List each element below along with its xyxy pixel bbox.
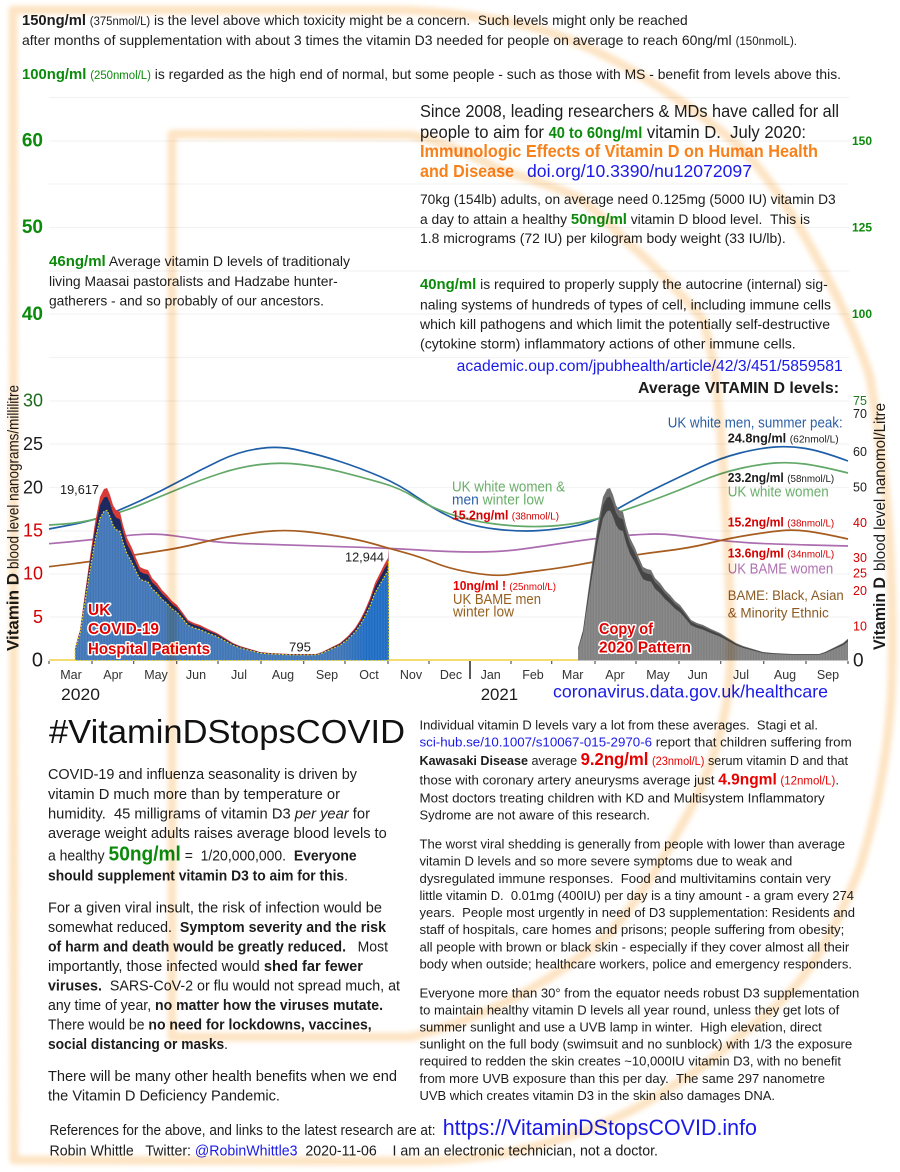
- label: BAME definition: & Minority Ethnic: [728, 605, 829, 621]
- x axis month labels: Feb: [522, 668, 544, 682]
- right column: viral shedding paragraph: body when outside; healthcare workers, police and emergency responders.: [420, 956, 852, 971]
- label: white men summer peak: [668, 416, 843, 446]
- right axis: nmol/L scale: 100: [852, 307, 872, 321]
- top text: toxicity and high-normal levels: 150ng/ml (375nmol/L) is the level above which toxicity might be a concern. Such levels might only be reached: [22, 12, 688, 29]
- x axis month labels: Mar: [60, 668, 82, 682]
- left axis title: [4, 385, 22, 651]
- right axis: nmol/L scale: 20: [853, 584, 867, 598]
- year labels: 2020: [61, 685, 100, 704]
- x axis month labels: Jun: [688, 668, 708, 682]
- right column: viral shedding paragraph: dysregulated immune responses. Food and multivitamins contain very: [420, 871, 831, 886]
- label: UK COVID-19 hospital patients: [88, 602, 210, 658]
- left column: seasonality paragraph: humidity. 45 milligrams of vitamin D3 per year for: [48, 807, 370, 823]
- callout: recommended 40 to 60 ng/ml: Since 2008, leading researchers & MDs have called for all: [420, 101, 839, 121]
- text block: 40 ng/ml immune system: 40ng/ml is required to properly supply the autocrine (internal) sig-: [420, 276, 828, 293]
- left column: health benefits paragraph: [48, 1069, 397, 1105]
- left column: seasonality paragraph: [48, 767, 387, 885]
- left axis: ng/ml scale: 40: [22, 304, 43, 325]
- left column: viral insult paragraph: of harm and death would be greatly reduced. Most: [48, 940, 388, 956]
- label: white women: 23.2ng/ml (58nmol/L): [728, 470, 834, 485]
- label: BAME women: 13.6ng/ml (34nmol/L): [728, 546, 834, 561]
- left axis: ng/ml scale: 10: [23, 564, 43, 584]
- text block: daily dose for 50 ng/ml: 1.8 micrograms (72 IU) per kilogram body weight (33 IU/lb).: [420, 230, 786, 246]
- right axis: nmol/L scale: 10: [853, 620, 867, 634]
- top text: toxicity and high-normal levels: [22, 12, 841, 83]
- left column: seasonality paragraph: average weight adults raises average blood levels to: [48, 826, 387, 842]
- year labels: 2021: [481, 685, 518, 704]
- callout: recommended 40 to 60 ng/ml: [420, 101, 839, 181]
- right column: sunlight paragraph: Everyone more than 30° from the equator needs robust D3 supplementation: [420, 986, 859, 1001]
- left column: seasonality paragraph: should supplement vitamin D3 to aim for this.: [48, 869, 348, 885]
- x axis month labels: Oct: [359, 668, 379, 682]
- footer: references and credits: Robin Whittle Twitter: @RobinWhittle3 2020-11-06 I am an electronic technician, not a doctor.: [50, 1144, 658, 1160]
- callout: recommended 40 to 60 ng/ml: Immunologic Effects of Vitamin D on Human Health: [420, 141, 818, 161]
- heading: average vitamin D levels: Average VITAMIN D levels:: [638, 380, 839, 397]
- footer: references and credits: References for the above, and links to the latest research are at:: [50, 1123, 436, 1139]
- right column: sunlight paragraph: from more UVB exposure than this per day. The same 297 nanometre: [420, 1071, 825, 1086]
- left axis title: blood level nanograms/millilitre: [6, 385, 22, 569]
- right column: sunlight paragraph: [420, 986, 859, 1103]
- right column: viral shedding paragraph: The worst viral shedding is generally from people with lower than average: [420, 837, 845, 852]
- right axis: nmol/L scale: 0: [853, 650, 864, 672]
- top text: toxicity and high-normal levels: 100ng/ml (250nmol/L) is regarded as the high end of normal, but some people - such as those with MS - benefit from levels above this.: [22, 66, 841, 83]
- right axis title: [871, 403, 889, 650]
- x axis month labels: Jul: [733, 668, 749, 682]
- right column: viral shedding paragraph: [420, 837, 855, 971]
- right axis: nmol/L scale: 50: [853, 481, 867, 495]
- text block: 46 ng/ml ancestors: gatherers - and so probably of our ancestors.: [49, 293, 324, 309]
- right column: Kawasaki disease paragraph: those with coronary artery aneurysms average just 4.9ngml (12nmol/L).: [420, 771, 839, 788]
- label: white men summer peak: 24.8ng/ml (62nmol/L): [728, 431, 839, 446]
- left column: seasonality paragraph: vitamin D much more than by temperature or: [48, 787, 340, 803]
- callout: recommended 40 to 60 ng/ml: and Disease: [420, 161, 514, 181]
- right column: Kawasaki disease paragraph: Sydrome are not aware of this research.: [420, 807, 650, 822]
- right axis: nmol/L scale: [852, 134, 872, 672]
- left axis: ng/ml scale: 25: [23, 434, 43, 454]
- left column: viral insult paragraph: importantly, those infected would shed far fewer: [48, 959, 363, 975]
- left column: viral insult paragraph: social distancing or masks.: [48, 1037, 228, 1053]
- right column: viral shedding paragraph: little vitamin D. 0.01mg (400IU) per day is a tiny amount - a gram every 274: [420, 888, 854, 903]
- left column: health benefits paragraph: There will be many other health benefits when we end: [48, 1069, 397, 1085]
- left column: viral insult paragraph: somewhat reduced. Symptom severity and the risk: [48, 920, 387, 936]
- right column: sunlight paragraph: UVB which creates vitamin D3 in the skin also damages DNA.: [420, 1088, 775, 1103]
- line: UK BAME men: [49, 530, 848, 575]
- right column: sunlight paragraph: to maintain healthy vitamin D levels all year round, unless they get lots of: [420, 1003, 840, 1018]
- line: UK BAME women: [49, 534, 848, 552]
- x axis month labels: Aug: [272, 668, 294, 682]
- right axis title: blood level nanomol/Litre: [872, 403, 889, 571]
- right column: sunlight paragraph: summer sunlight and use a UVB lamp in winter. High elevation, direct: [420, 1020, 822, 1035]
- label: copy of 2020 pattern: 2020 Pattern: [599, 640, 691, 657]
- text block: daily dose for 50 ng/ml: 70kg (154lb) adults, on average need 0.125mg (5000 IU) vitamin D3: [420, 191, 836, 207]
- left column: viral insult paragraph: There would be no need for lockdowns, vaccines,: [48, 1018, 372, 1034]
- link: academic.oup.com: academic.oup.com/jpubhealth/article/42/3/451/5859581: [457, 358, 843, 375]
- label: BAME men summer: 15.2ng/ml (38nmol/L): [728, 515, 834, 530]
- label: white women and men winter low: men winter low: [452, 492, 544, 508]
- left axis: ng/ml scale: 20: [23, 478, 43, 498]
- right axis: nmol/L scale: 30: [853, 551, 867, 565]
- x axis month labels: Nov: [400, 668, 423, 682]
- label: BAME men winter low: UK BAME men: [453, 592, 541, 608]
- label: BAME men winter low: winter low: [452, 605, 514, 621]
- left column: seasonality paragraph: a healthy 50ng/ml = 1/20,000,000. Everyone: [48, 844, 357, 866]
- patient count annotations: 19,617: [60, 482, 99, 497]
- text block: 46 ng/ml ancestors: 46ng/ml Average vitamin D levels of traditionaly: [49, 253, 350, 270]
- text block: 46 ng/ml ancestors: living Maasai pastoralists and Hadzabe hunter-: [49, 273, 338, 289]
- callout: recommended 40 to 60 ng/ml: doi.org/10.3390/nu12072097: [527, 161, 752, 181]
- x axis month labels: Jul: [231, 668, 247, 682]
- year labels: [61, 685, 518, 704]
- right column: Kawasaki disease paragraph: Individual vitamin D levels vary a lot from these averages. Stagi et al.: [420, 717, 818, 732]
- callout: recommended 40 to 60 ng/ml: people to aim for 40 to 60ng/ml vitamin D. July 2020:: [420, 122, 806, 142]
- chart: UK COVID-19 hospital patients 2020: [75, 488, 389, 660]
- x axis month labels: [60, 668, 839, 682]
- left column: seasonality paragraph: COVID-19 and influenza seasonality is driven by: [48, 767, 358, 783]
- x axis month labels: Aug: [774, 668, 796, 682]
- right column: Kawasaki disease paragraph: Kawasaki Disease average 9.2ng/ml (23nmol/L) serum vitamin D and that: [420, 749, 848, 769]
- x axis month labels: Jun: [186, 668, 206, 682]
- left axis: ng/ml scale: 60: [22, 131, 43, 152]
- text block: 40 ng/ml immune system: (cytokine storm) inflammatory actions of other immune cells.: [420, 336, 796, 352]
- left axis title: Vitamin D: [4, 573, 22, 651]
- right axis: nmol/L scale: 70: [853, 407, 867, 421]
- text block: 40 ng/ml immune system: [419, 276, 831, 352]
- x axis baseline and ticks: [49, 660, 848, 679]
- left axis: ng/ml scale: 50: [22, 217, 43, 238]
- patient count annotations: 12,944: [345, 550, 384, 565]
- right column: Kawasaki disease paragraph: [420, 717, 852, 822]
- x axis month labels: Dec: [440, 668, 462, 682]
- right column: viral shedding paragraph: staff of hospitals, care homes and prisons; people suffering from obesity;: [420, 922, 844, 937]
- label: UK COVID-19 hospital patients: Hospital Patients: [88, 641, 210, 658]
- right column: Kawasaki disease paragraph: Most doctors treating children with KD and Multisystem Inflammatory: [420, 790, 825, 805]
- label: white women: UK white women: [728, 485, 829, 501]
- x axis month labels: Apr: [605, 668, 625, 682]
- label: copy of 2020 pattern: Copy of: [599, 621, 654, 638]
- left axis: ng/ml scale: 5: [33, 607, 43, 627]
- right axis title: Vitamin D: [871, 577, 889, 650]
- patient count annotations: [60, 482, 384, 655]
- text block: daily dose for 50 ng/ml: [420, 191, 836, 246]
- label: white women: [728, 470, 834, 501]
- label: BAME men winter low: [452, 578, 556, 621]
- top text: toxicity and high-normal levels: after months of supplementation with about 3 times the vitamin D3 needed for people on average to reach 60ng/ml (150nmolL).: [22, 32, 797, 48]
- right axis: nmol/L scale: 150: [852, 134, 872, 148]
- label: copy of 2020 pattern: [599, 621, 691, 657]
- left column: viral insult paragraph: For a given viral insult, the risk of infection would be: [48, 901, 382, 917]
- right column: viral shedding paragraph: all people with brown or black skin - especially if they cover almost all their: [420, 939, 850, 954]
- label: white women and men winter low: [452, 480, 565, 522]
- label: UK COVID-19 hospital patients: COVID-19: [88, 621, 159, 638]
- left column: viral insult paragraph: any time of year, no matter how the viruses mutate.: [48, 998, 383, 1014]
- left axis: ng/ml scale: 0: [32, 650, 43, 672]
- label: BAME women: UK BAME women: [728, 561, 833, 577]
- label: white men summer peak: UK white men, summer peak:: [668, 416, 843, 432]
- left axis: ng/ml scale: 30: [23, 391, 43, 411]
- right axis: nmol/L scale: 125: [852, 221, 872, 235]
- label: BAME definition: [728, 588, 844, 621]
- patient count annotations: 795: [289, 640, 311, 655]
- label: BAME men winter low: 10ng/ml ! (25nmol/L): [453, 578, 556, 593]
- text block: daily dose for 50 ng/ml: a day to attain a healthy 50ng/ml vitamin D blood level. This is: [420, 211, 810, 228]
- left column: viral insult paragraph: viruses. SARS-CoV-2 or flu would not spread much, at: [48, 979, 400, 995]
- left column: health benefits paragraph: the Vitamin D Deficiency Pandemic.: [48, 1089, 280, 1105]
- chart grid lines: [49, 98, 849, 617]
- x axis month labels: Sep: [316, 668, 338, 682]
- footer: references and credits: https://VitaminDStopsCOVID.info: [443, 1115, 757, 1140]
- x axis month labels: Jan: [481, 668, 501, 682]
- right axis: nmol/L scale: 60: [853, 445, 867, 459]
- text block: 46 ng/ml ancestors: [49, 253, 350, 309]
- link: coronavirus data: coronavirus.data.gov.uk/healthcare: [553, 682, 828, 702]
- x axis month labels: Sep: [817, 668, 839, 682]
- right column: sunlight paragraph: required to redden the skin creates ~10,000IU vitamin D3, with no benefit: [420, 1054, 841, 1069]
- label: white women and men winter low: UK white women &: [452, 480, 565, 496]
- right column: sunlight paragraph: sunlight on the full body (swimsuit and no sunblock) with 1/3 the exposure: [420, 1037, 852, 1052]
- main heading: hashtag: #VitaminDStopsCOVID: [49, 713, 405, 750]
- x axis month labels: Apr: [103, 668, 123, 682]
- text block: 40 ng/ml immune system: which kill pathogens and which limit the potentially self-destructive: [419, 316, 830, 332]
- right column: viral shedding paragraph: vitamin D levels and so more severe symptoms due to weak and: [420, 854, 792, 869]
- right column: viral shedding paragraph: years. People most urgently in need of D3 supplementation: Residents and: [420, 905, 855, 920]
- label: white women and men winter low: 15.2ng/ml (38nmol/L): [452, 507, 559, 522]
- label: UK COVID-19 hospital patients: UK: [88, 602, 111, 619]
- left axis: ng/ml scale: [22, 131, 43, 671]
- right column: Kawasaki disease paragraph: sci-hub.se/10.1007/s10067-015-2970-6 report that children suffering from: [420, 734, 852, 749]
- left column: viral insult paragraph: [48, 901, 400, 1053]
- x axis month labels: May: [144, 668, 169, 682]
- label: BAME definition: BAME: Black, Asian: [728, 588, 844, 604]
- label: BAME women: [728, 546, 834, 577]
- x axis month labels: May: [646, 668, 671, 682]
- right axis: nmol/L scale: 40: [853, 516, 867, 530]
- chart: copy of 2020 pattern: [578, 488, 848, 660]
- text block: 40 ng/ml immune system: naling systems of hundreds of types of cell, including immune cells: [420, 297, 831, 313]
- x axis month labels: Mar: [562, 668, 583, 682]
- left axis: ng/ml scale: 15: [23, 521, 43, 541]
- footer: references and credits: [50, 1115, 757, 1160]
- right axis: nmol/L scale: 75: [853, 394, 867, 408]
- right axis: nmol/L scale: 25: [853, 567, 867, 581]
- line: UK white men: [49, 447, 848, 531]
- line: UK white women: [49, 463, 848, 527]
